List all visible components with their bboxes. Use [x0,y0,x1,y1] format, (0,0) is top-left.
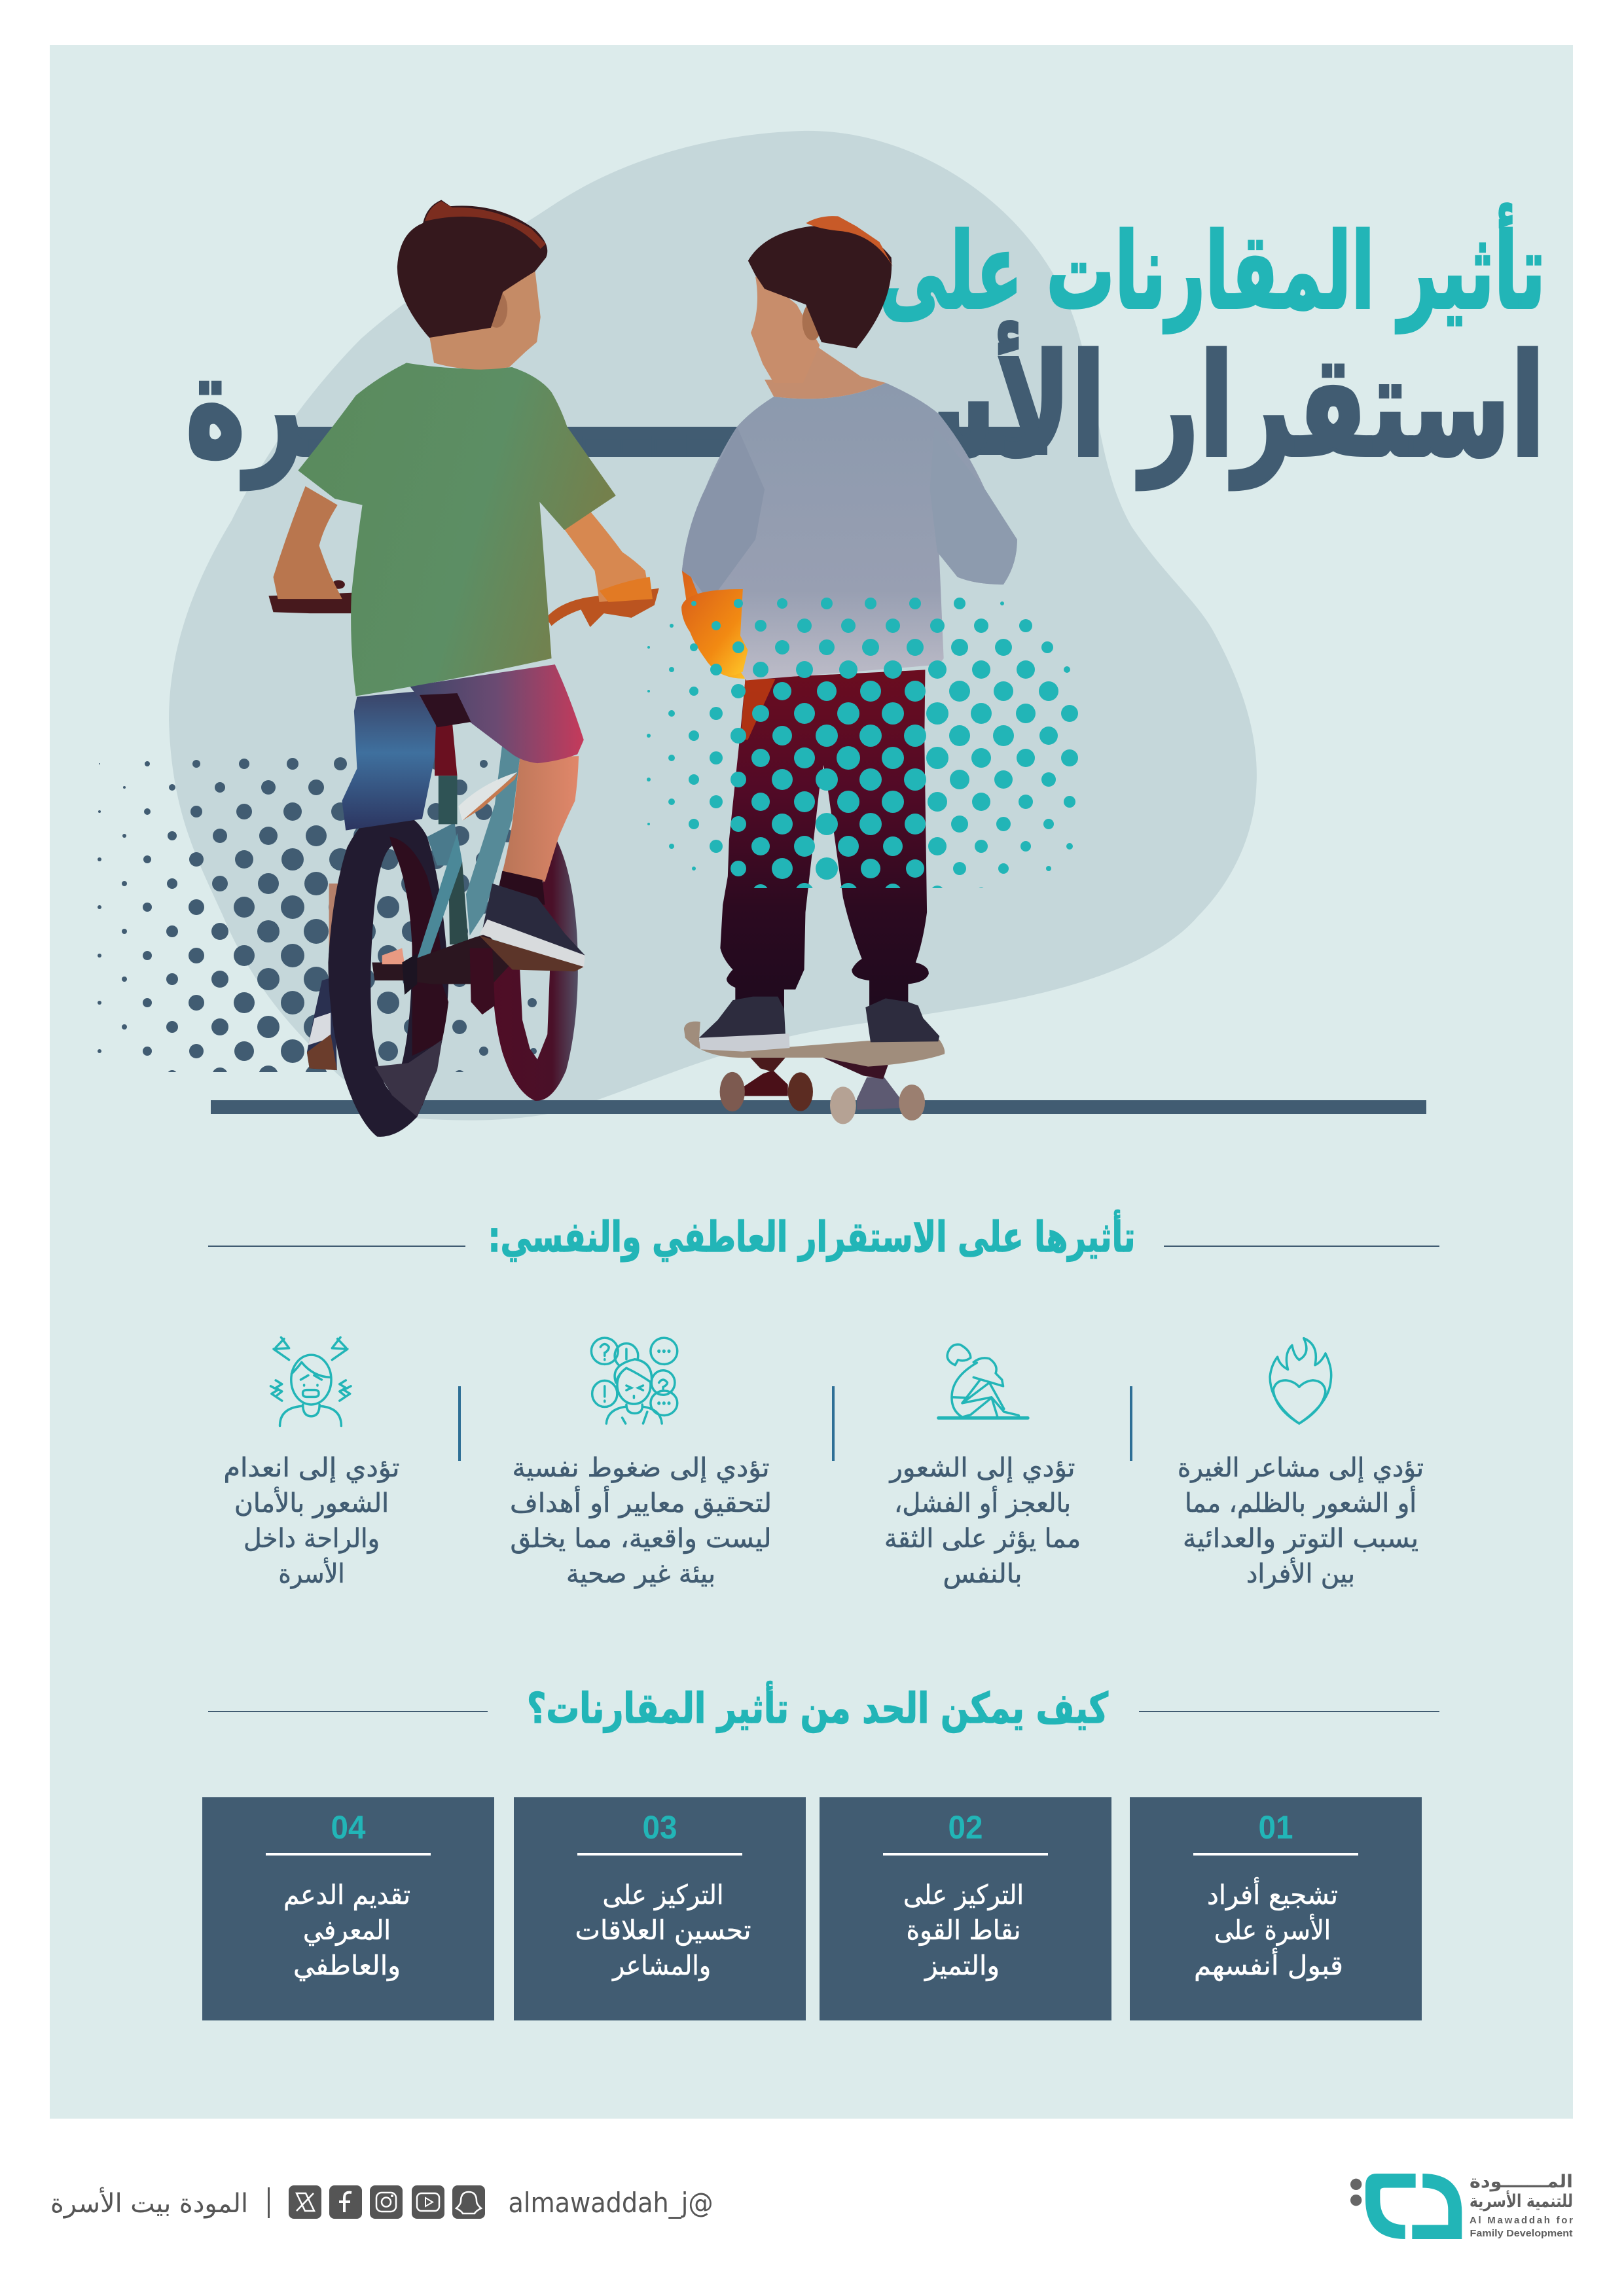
column dividers [458,1386,1132,1461]
card 02 [820,1797,1111,2020]
logo wordmark: للتنمية الأسرية [1470,2190,1573,2212]
footer slogan: المودة بيت الأسرة [50,2187,248,2219]
icon: facebook [329,2185,362,2219]
card 01 [1130,1797,1422,2020]
card 03: 03 [643,1809,677,1846]
card 04: المعرفي [303,1914,391,1946]
card 02: 02 [948,1809,983,1846]
ground bar [211,1100,1426,1114]
text column 1 [1178,1453,1424,1589]
logo [1350,2172,1573,2239]
logo mark [1350,2174,1462,2239]
text column 2: بالنفس [943,1559,1022,1589]
photo: boy on skateboard [681,216,1017,1124]
card 04: والعاطفي [293,1950,401,1982]
icon: stressed man [271,1337,351,1426]
text column 3: لتحقيق معايير أو أهداف [510,1486,772,1518]
card 02: والتميز [924,1950,1000,1981]
icon: x [289,2185,321,2219]
text column 3: تؤدي إلى ضغوط نفسية [512,1453,770,1483]
card 03: والمشاعر [611,1950,711,1981]
background blob [169,131,1257,1121]
bicycle lower part [307,722,578,1137]
icon: snapchat [452,2185,485,2219]
text column 4: والراحة داخل [244,1524,380,1554]
section heading: effects: تأثيرها على الاستقرار العاطفي والنفسي: [488,1210,1135,1262]
logo wordmark: Family Development [1470,2228,1572,2239]
logo wordmark [1470,2172,1573,2239]
footer separator [268,2187,270,2218]
text column 4: الشعور بالأمان [234,1486,389,1518]
card 03: التركيز على [602,1879,724,1910]
skateboard and trousers [684,670,945,1124]
logo wordmark: Al Mawaddah for [1470,2215,1573,2226]
icon: youtube [412,2185,444,2219]
icon: sad person sitting [939,1344,1028,1418]
text column 1: بين الأفراد [1246,1557,1355,1589]
section heading: how to reduce: كيف يمكن الحد من تأثير المقارنات؟ [527,1681,1109,1733]
text column 1: تؤدي إلى مشاعر الغيرة [1178,1453,1424,1483]
sweater, hand and head [682,216,1017,681]
icon: woman with worried speech bubbles [591,1338,677,1424]
card 02: نقاط القوة [906,1914,1021,1946]
text column 4: الأسرة [279,1557,344,1589]
photo: boy on bicycle [268,200,659,1137]
text column 2: مما يؤثر على الثقة [884,1524,1081,1554]
text column 2 [884,1453,1081,1589]
text column 1: أو الشعور بالظلم، مما [1185,1486,1416,1518]
card 04: تقديم الدعم [283,1879,410,1910]
text column 3 [510,1453,772,1589]
text column 1: يسبب التوتر والعدائية [1183,1524,1418,1554]
card 02: التركيز على [903,1879,1024,1910]
icon: instagram [370,2185,403,2219]
text column 2: بالعجز أو الفشل، [894,1486,1071,1518]
card 04: 04 [331,1809,366,1846]
halftone dots: right (over the boy) [647,598,1078,901]
card 01: قبول أنفسهم [1194,1948,1343,1981]
card 01: الأسرة على [1214,1913,1331,1946]
logo wordmark: المـــــــودة [1470,2172,1573,2192]
footer handle: almawaddah_j@ [508,2187,713,2219]
halftone dots: left [98,757,537,1086]
card 01: 01 [1258,1809,1293,1846]
text column 3: ليست واقعية، مما يخلق [511,1524,771,1554]
upper body [268,200,659,696]
text column 4 [224,1453,399,1589]
card 01: تشجيع أفراد [1207,1877,1338,1910]
text column 3: بيئة غير صحية [566,1559,715,1589]
shorts and right leg [342,664,585,971]
icon: flaming heart [1270,1338,1331,1424]
text column 2: تؤدي إلى الشعور [888,1453,1075,1483]
text column 4: تؤدي إلى انعدام [224,1453,399,1483]
social icons [289,2185,485,2219]
card 04 [202,1797,494,2020]
card 03 [514,1797,806,2020]
card 03: تحسين العلاقات [575,1914,751,1946]
